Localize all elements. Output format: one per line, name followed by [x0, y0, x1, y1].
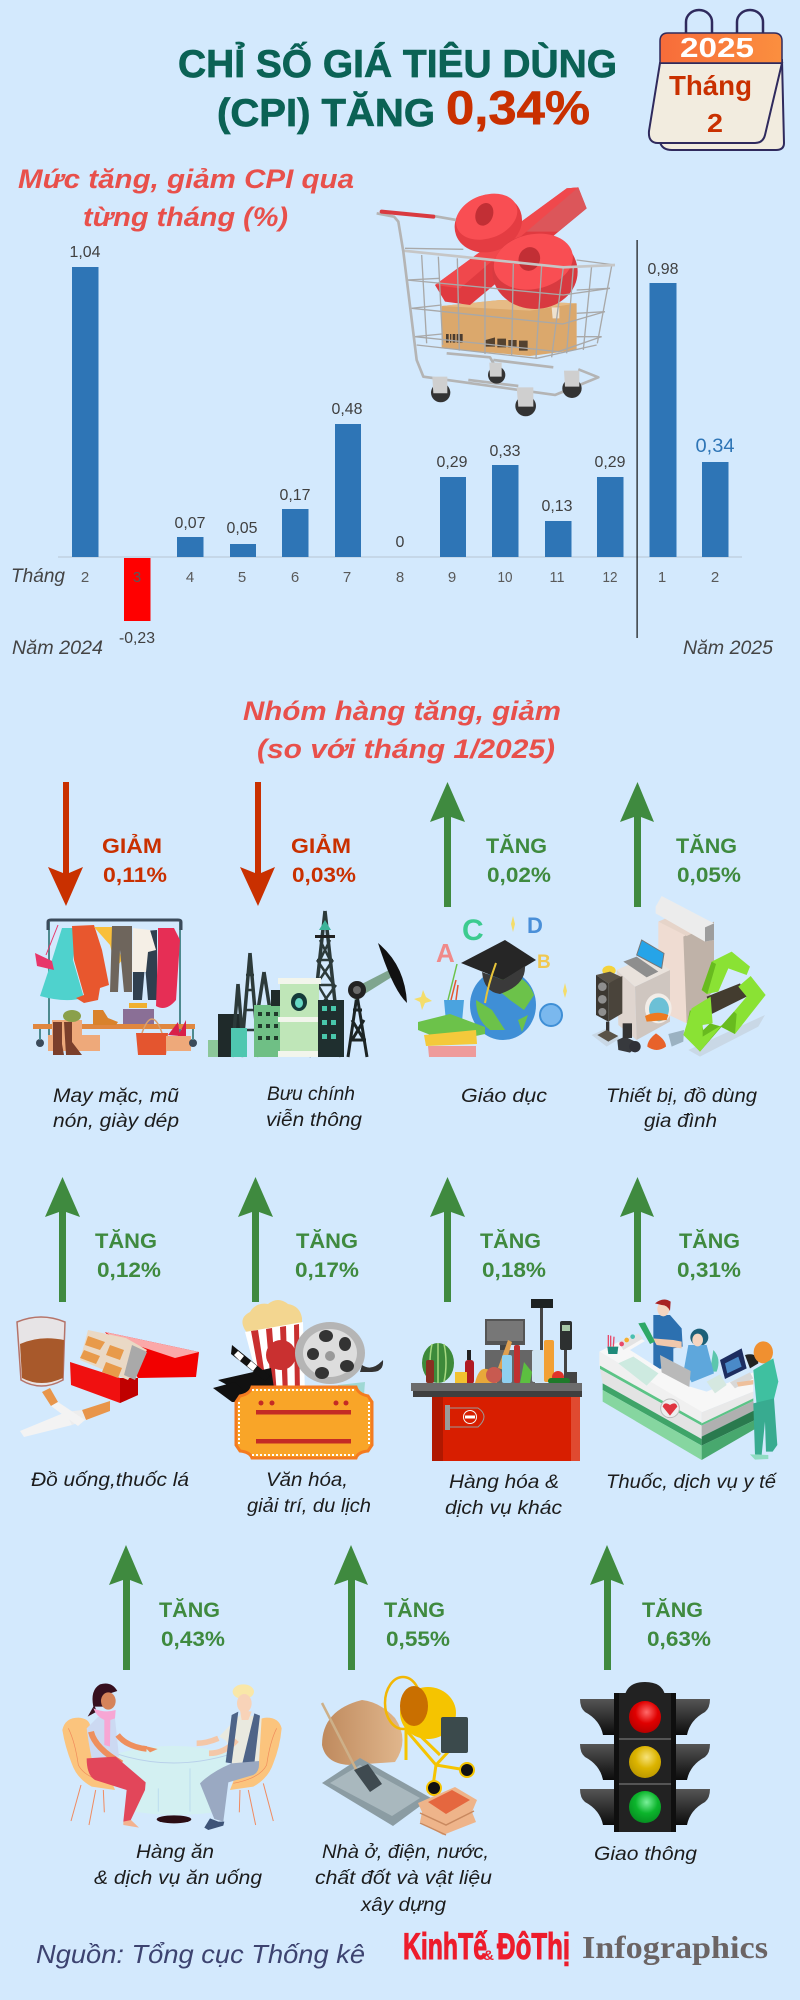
- caption: Đồ uống,thuốc lá: [31, 1470, 189, 1491]
- change label: [295, 1230, 359, 1282]
- change label: [676, 835, 741, 887]
- arrow up: [109, 1545, 143, 1670]
- change label: [677, 1230, 741, 1282]
- caption: Thuốc, dịch vụ y tế: [606, 1472, 778, 1493]
- caption: [266, 1084, 362, 1131]
- value labels: -0,23: [119, 630, 155, 647]
- change label: TĂNG: [95, 1230, 157, 1253]
- icon: calendar month 2 of 2025: 2: [707, 108, 723, 138]
- panel: household goods, up 0.05%: [592, 782, 766, 1132]
- caption: Bưu chính: [267, 1084, 355, 1105]
- month labels: 12: [602, 569, 618, 586]
- change label: 0,11%: [103, 864, 167, 887]
- icon: appliances and recycling: [592, 896, 766, 1057]
- month labels: 1: [658, 569, 666, 586]
- change label: [384, 1599, 450, 1651]
- icon: education globe and graduation cap: C: [462, 914, 484, 947]
- arrow down: [48, 782, 83, 906]
- panel: catering, up 0.43%: [62, 1545, 282, 1889]
- wheels: [431, 363, 582, 416]
- month labels: 3: [133, 569, 141, 586]
- month labels: 8: [396, 569, 404, 586]
- front wires: [407, 255, 612, 358]
- icon: traffic light: [580, 1682, 710, 1832]
- icon: two people at a table: [62, 1683, 282, 1830]
- logo: Kinh tế & Đô thị Infographics: KinhTế: [403, 1926, 487, 1967]
- arrow up: [430, 1177, 465, 1302]
- title: (CPI) TĂNG: [217, 91, 435, 135]
- icon: cinema ticket, popcorn and film reel: [213, 1300, 383, 1458]
- month labels: 2: [711, 569, 719, 586]
- caption: May mặc, mũ: [53, 1086, 179, 1107]
- change label: [95, 1230, 161, 1282]
- change label: 0,12%: [97, 1259, 161, 1282]
- logo: Kinh tế & Đô thị Infographics: [403, 1926, 768, 1967]
- caption: [445, 1472, 563, 1519]
- change label: GIẢM: [102, 835, 162, 858]
- negative bar March 2024: [124, 558, 150, 621]
- caption: viễn thông: [266, 1110, 362, 1131]
- title: [178, 41, 617, 135]
- icon: oil city: [208, 911, 407, 1057]
- heading: product groups: [243, 696, 561, 764]
- value labels: 0,29: [594, 454, 626, 471]
- caption: & dịch vụ ăn uống: [94, 1868, 262, 1889]
- change label: TĂNG: [642, 1599, 703, 1622]
- change label: TĂNG: [486, 835, 547, 858]
- caption: Thiết bị, đồ dùng: [606, 1086, 757, 1107]
- axis captions: [11, 566, 773, 659]
- value labels: 0,17: [280, 487, 311, 504]
- icon: clothes rack: [33, 920, 197, 1055]
- icon: education globe and graduation cap: [414, 913, 567, 1057]
- change label: 0,18%: [482, 1259, 546, 1282]
- value labels: 0,34: [696, 436, 735, 457]
- caption: [247, 1470, 371, 1517]
- caption: [606, 1086, 757, 1132]
- change label: [486, 835, 551, 887]
- title: CHỈ SỐ GIÁ TIÊU DÙNG: [178, 41, 617, 86]
- value labels: 0,98: [648, 261, 679, 278]
- caption: nón, giày dép: [53, 1111, 179, 1132]
- value labels: 0,05: [226, 520, 258, 537]
- caption: [315, 1842, 492, 1916]
- caption: Hàng ăn: [136, 1842, 214, 1863]
- arrow up: [620, 782, 654, 907]
- change label: [102, 835, 167, 887]
- icon: shopping cart with percent sign: [377, 185, 615, 416]
- caption: Nhà ở, điện, nước,: [322, 1842, 489, 1863]
- change label: 0,43%: [161, 1628, 225, 1651]
- value labels: 0: [396, 534, 405, 551]
- panel: education, up 0.02%: [414, 782, 567, 1107]
- change label: GIẢM: [291, 835, 351, 858]
- month labels: 2: [81, 569, 89, 586]
- change label: 0,05%: [677, 864, 741, 887]
- month labels: 7: [343, 569, 351, 586]
- caption: Giáo dục: [461, 1086, 548, 1107]
- logo: Kinh tế & Đô thị Infographics: ĐôThị: [497, 1926, 570, 1967]
- caption: gia đình: [644, 1111, 717, 1132]
- panel: clothing, down 0.11%: [33, 782, 197, 1132]
- heading: product groups: Nhóm hàng tăng, giảm: [243, 696, 561, 726]
- value labels: 0,29: [436, 454, 468, 471]
- change label: TĂNG: [159, 1599, 220, 1622]
- value labels: 0,48: [332, 401, 363, 418]
- axis captions: Tháng: [11, 566, 65, 587]
- icon: cement mixer, sand and bags: [322, 1677, 477, 1835]
- arrow up: [620, 1177, 654, 1302]
- arrow up: [430, 782, 465, 907]
- panel: post and telecom, down 0.03%: [208, 782, 407, 1131]
- icon: calendar month 2 of 2025: Tháng: [669, 70, 752, 101]
- panel: housing, power, water, fuel and building materials, up 0.55%: [315, 1545, 492, 1916]
- icon: education globe and graduation cap: D: [527, 913, 543, 938]
- value labels: 0,13: [542, 498, 573, 515]
- caption: xây dựng: [360, 1895, 446, 1916]
- panel: other goods and services, up 0.18%: [411, 1177, 582, 1519]
- value labels: [70, 244, 735, 647]
- icon: drink and cigarettes: [17, 1317, 199, 1437]
- change label: [159, 1599, 225, 1651]
- change label: 0,17%: [295, 1259, 359, 1282]
- percent sign: [435, 187, 587, 305]
- icon: hospital reception: [599, 1300, 778, 1460]
- month labels: 9: [448, 569, 456, 586]
- caption: Hàng hóa &: [449, 1472, 559, 1493]
- month labels: 4: [186, 569, 194, 586]
- icon: education globe and graduation cap: B: [537, 952, 551, 973]
- caption: [94, 1842, 262, 1889]
- change label: TĂNG: [296, 1230, 358, 1253]
- icon: education globe and graduation cap: A: [436, 938, 455, 968]
- change label: 0,63%: [647, 1628, 711, 1651]
- caption: [53, 1086, 179, 1132]
- icon: calendar month 2 of 2025: [649, 10, 784, 150]
- change label: [291, 835, 356, 887]
- arrow up: [238, 1177, 273, 1302]
- logo: Kinh tế & Đô thị Infographics: Infographics: [582, 1929, 768, 1965]
- icon: supermarket checkout counter: [411, 1299, 582, 1461]
- arrow up: [45, 1177, 80, 1302]
- change label: [642, 1599, 711, 1651]
- value labels: 1,04: [70, 244, 101, 261]
- month labels: 11: [550, 569, 564, 586]
- month labels: 10: [498, 569, 512, 586]
- change label: [480, 1230, 546, 1282]
- year divider: [636, 240, 638, 638]
- logo: Kinh tế & Đô thị Infographics: &: [483, 1947, 494, 1963]
- change label: TĂNG: [480, 1230, 541, 1253]
- carton box: [442, 300, 577, 356]
- caption: Giao thông: [594, 1844, 697, 1865]
- heading: monthly CPI change: từng tháng (%): [83, 202, 288, 232]
- caption: dịch vụ khác: [445, 1498, 563, 1519]
- value labels: 0,33: [490, 443, 521, 460]
- arrow up: [334, 1545, 368, 1670]
- heading: monthly CPI change: Mức tăng, giảm CPI qua: [18, 164, 354, 194]
- change label: 0,02%: [487, 864, 551, 887]
- panel: medicine and health services, up 0.31%: [599, 1177, 778, 1493]
- month labels: 6: [291, 569, 299, 586]
- month labels: [81, 569, 719, 586]
- bars: [72, 267, 728, 557]
- title: 0,34%: [446, 81, 590, 134]
- caption: chất đốt và vật liệu: [315, 1868, 492, 1889]
- change label: 0,03%: [292, 864, 356, 887]
- axis captions: Năm 2025: [683, 638, 773, 659]
- arrow up: [590, 1545, 624, 1670]
- frame and handle: [377, 213, 598, 395]
- value labels: 0,07: [174, 515, 206, 532]
- change label: 0,55%: [386, 1628, 450, 1651]
- panel: beverages and tobacco, up 0.12%: [17, 1177, 199, 1491]
- change label: TĂNG: [384, 1599, 445, 1622]
- back wires: [405, 248, 615, 337]
- panel: transport, up 0.63%: [580, 1545, 711, 1865]
- change label: 0,31%: [677, 1259, 741, 1282]
- month labels: 5: [238, 569, 246, 586]
- caption: Văn hóa,: [266, 1470, 348, 1491]
- change label: TĂNG: [679, 1230, 740, 1253]
- icon: calendar month 2 of 2025: 2025: [680, 32, 754, 63]
- panel: culture and entertainment, up 0.17%: [213, 1177, 383, 1517]
- change label: TĂNG: [676, 835, 737, 858]
- source note: Nguồn: Tổng cục Thống kê: [36, 1939, 365, 1969]
- axis captions: Năm 2024: [12, 638, 103, 659]
- arrow down: [240, 782, 275, 906]
- heading: monthly CPI change: [18, 164, 354, 232]
- heading: product groups: (so với tháng 1/2025): [257, 734, 555, 764]
- caption: giải trí, du lịch: [247, 1496, 371, 1517]
- bar chart: monthly CPI: [11, 240, 773, 659]
